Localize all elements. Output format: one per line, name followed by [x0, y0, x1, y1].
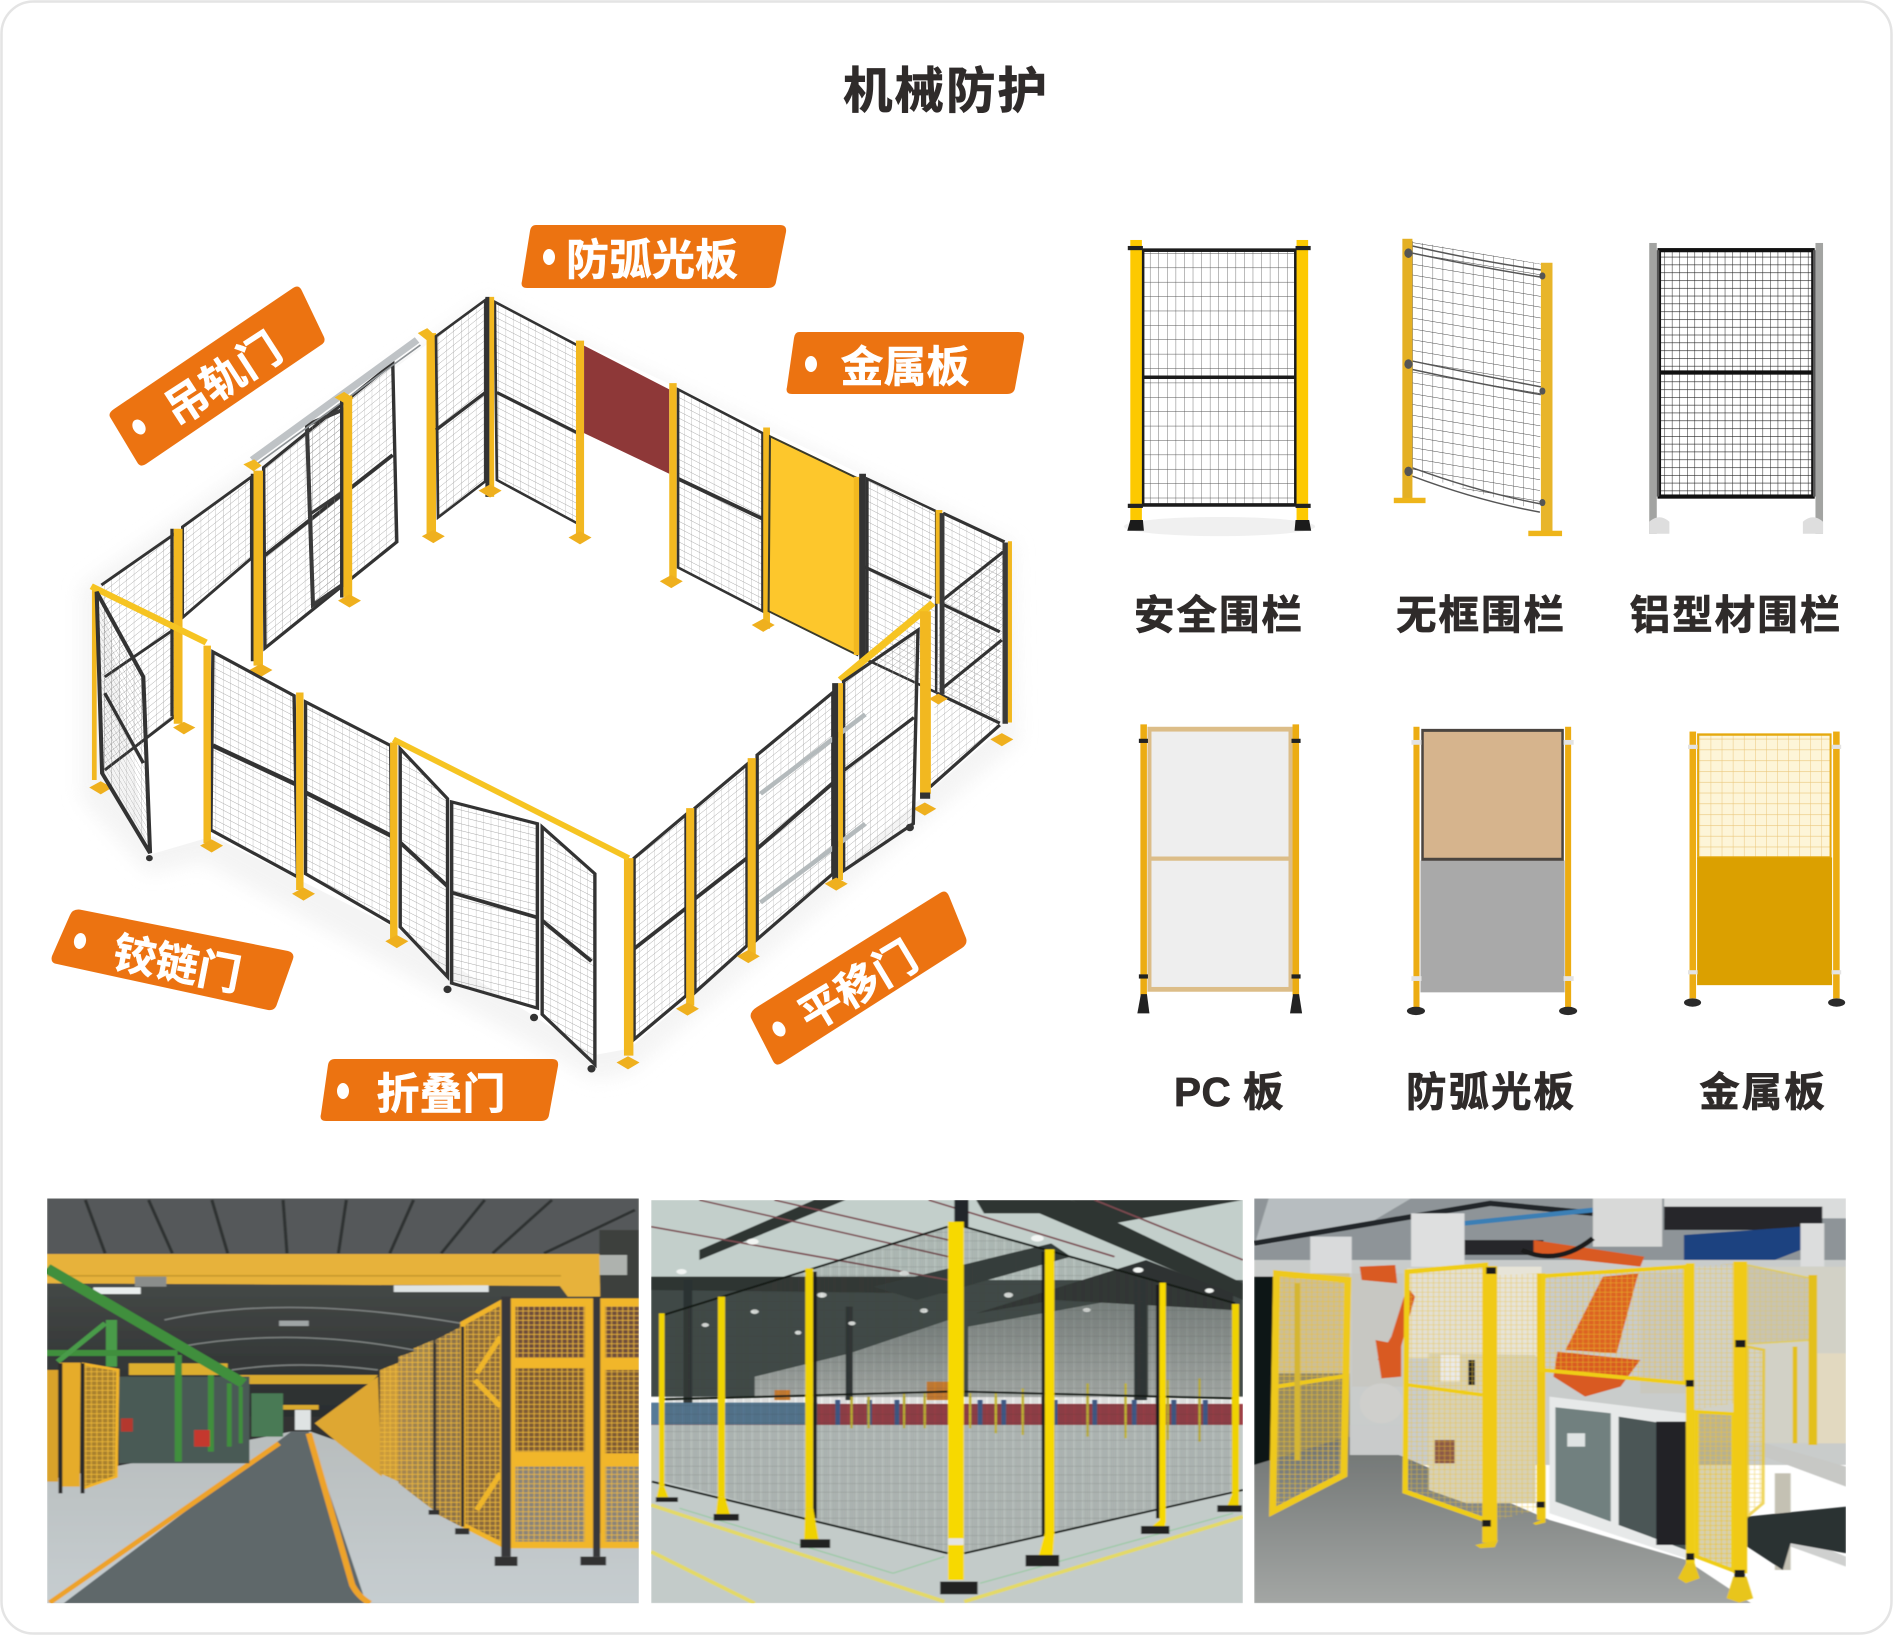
floor	[1254, 1437, 1751, 1603]
floor shadow	[81, 299, 1017, 1080]
left doors	[47, 1370, 58, 1482]
background	[1277, 1273, 1350, 1373]
back wall right panels	[660, 383, 775, 632]
folding door top rail	[393, 739, 629, 858]
right gate posts	[1696, 1263, 1733, 1410]
long right fence	[315, 1377, 382, 1477]
label: folding door	[321, 1059, 558, 1121]
label: overhead rail door	[110, 287, 325, 466]
overhead rail	[252, 340, 420, 465]
hinged door	[89, 586, 206, 861]
caption: metal board: 金属板	[1699, 1069, 1827, 1115]
caption: aluminium profile fence: 铝型材围栏	[1630, 592, 1842, 638]
yellow sliding header and post	[840, 603, 936, 816]
hinged door	[1276, 1276, 1345, 1506]
red anti-arc panel	[584, 346, 669, 474]
photo: factory aisle with yellow fences	[47, 1198, 639, 1603]
panel: PC board	[1137, 724, 1302, 1013]
right back panels	[854, 474, 1013, 787]
ceiling beams	[699, 1200, 846, 1260]
label: hinged door	[52, 910, 293, 1010]
caption: anti-arc board: 防弧光板	[1406, 1069, 1576, 1115]
white machine	[1549, 1397, 1686, 1558]
caption: frameless fence: 无框围栏	[1396, 592, 1566, 638]
foreground cage panels	[510, 1298, 593, 1548]
floor	[651, 1425, 1243, 1603]
folding door	[400, 749, 596, 1072]
mesh fill	[664, 1227, 948, 1553]
left machines	[119, 1377, 249, 1463]
back left wall	[101, 363, 397, 770]
floor lines	[651, 1505, 1243, 1603]
posts	[659, 1313, 665, 1487]
panel: frameless fence	[1394, 239, 1562, 536]
upper window frame	[1542, 1267, 1686, 1383]
dark pillar	[1254, 1277, 1276, 1465]
label: sliding door: 平移门	[791, 933, 926, 1041]
back corner panels	[436, 297, 592, 544]
blue gantry	[1684, 1227, 1801, 1260]
title: 机械防护	[843, 64, 1049, 119]
label: hinged door: 铰链门	[109, 929, 245, 1001]
middle gate	[1405, 1265, 1485, 1520]
label: overhead rail door: 吊轨门	[156, 325, 291, 435]
label: metal panel	[787, 332, 1024, 394]
label: metal panel: 金属板	[840, 344, 970, 392]
label: anti-arc panel	[522, 225, 786, 288]
background posts	[852, 1378, 1199, 1442]
back wall posts, left	[170, 328, 445, 734]
fence enclosure diagram	[81, 297, 1017, 1080]
yellow metal panel	[769, 436, 859, 655]
header panel at right	[1747, 1265, 1814, 1344]
caption: PC board: PC 板	[1174, 1069, 1284, 1115]
label: sliding door	[751, 892, 966, 1065]
conveyor	[1788, 1464, 1846, 1487]
robots	[1360, 1265, 1397, 1283]
label: folding door: 折叠门	[376, 1071, 506, 1119]
racks	[651, 1404, 1243, 1426]
caption: safety fence: 安全围栏	[1134, 592, 1304, 638]
sliding door wall	[617, 630, 918, 1069]
photo: large warehouse fence corner	[651, 1200, 1243, 1603]
back wall	[651, 1280, 1243, 1397]
photo: robot cell with yellow guarding	[1254, 1198, 1846, 1603]
frames	[652, 1227, 1243, 1553]
panel: metal board	[1684, 732, 1845, 1007]
columns	[1310, 1237, 1352, 1273]
cabinet	[1429, 1353, 1536, 1503]
floor	[47, 1432, 639, 1603]
panel: aluminium profile fence	[1649, 243, 1823, 534]
floor	[101, 299, 1007, 1055]
front left wall	[200, 646, 408, 948]
ceiling lights	[676, 1235, 1214, 1335]
panel: safety fence	[1124, 240, 1315, 536]
panel: anti-arc board	[1407, 727, 1577, 1015]
product panels	[1124, 239, 1845, 1015]
label: anti-arc panel: 防弧光板	[566, 237, 738, 285]
